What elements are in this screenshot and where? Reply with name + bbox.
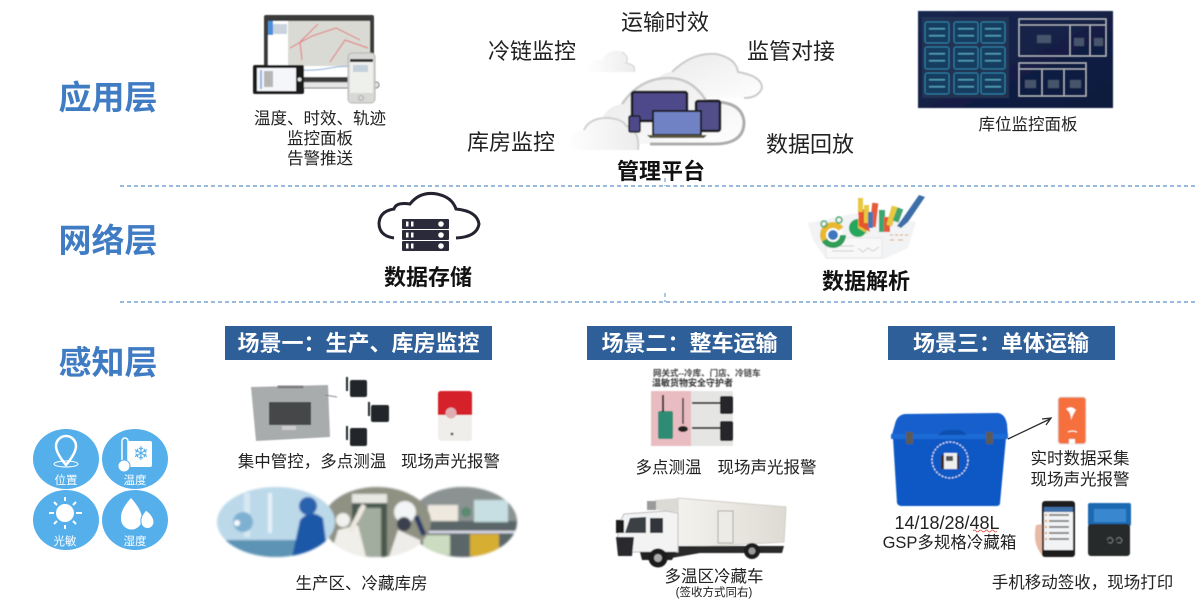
heading: data analysis: 数据解析 bbox=[822, 269, 910, 294]
text: monitoring description: 告警推送 bbox=[287, 149, 354, 168]
text: monitoring description: 温度、时效、轨迹 bbox=[254, 109, 386, 128]
icon: sound and light alarm bbox=[438, 391, 472, 441]
panel: warehouse dashboard bbox=[918, 11, 1113, 108]
text: monitoring description: 监控面板 bbox=[287, 129, 353, 148]
banner: scene two bbox=[587, 326, 792, 360]
icon: temperature: ❄ bbox=[133, 444, 149, 465]
icon: temperature bbox=[102, 429, 168, 489]
text: truck caption: 多温区冷藏车 bbox=[664, 567, 764, 586]
text: mobile sign-off caption: 手机移动签收，现场打印 bbox=[992, 573, 1173, 592]
panel: gateway sensor card bbox=[651, 368, 761, 446]
banner: scene one bbox=[225, 326, 492, 360]
text: cooler caption: 14/18/28/48L bbox=[894, 513, 1000, 533]
text: real-time capture caption: 现场声光报警 bbox=[1030, 470, 1130, 489]
icon: data analysis charts bbox=[808, 195, 925, 259]
label: regulatory integration: 监管对接 bbox=[747, 39, 835, 64]
divider lines bbox=[120, 178, 1197, 302]
arrow: cooler to tag bbox=[1008, 418, 1051, 439]
heading: sensing layer: 感知层 bbox=[58, 344, 158, 381]
banner: scene three: 场景三：单体运输 bbox=[913, 331, 1089, 356]
text: dashboard caption: 库位监控面板 bbox=[978, 115, 1078, 134]
text: production caption: 生产区、冷藏库房 bbox=[296, 574, 428, 593]
banner: scene three bbox=[888, 326, 1115, 360]
icon: humidity: 湿度 bbox=[124, 534, 147, 548]
icons: wireless sensors bbox=[346, 377, 389, 446]
text: alarm caption two: 现场声光报警 bbox=[718, 458, 816, 477]
text: truck caption: (签收方式同右) bbox=[676, 585, 752, 599]
label: warehouse monitoring: 库房监控 bbox=[467, 130, 555, 155]
icons: sensing capabilities bbox=[33, 429, 168, 550]
text: monitoring description bbox=[254, 109, 386, 168]
label: cold chain monitoring: 冷链监控 bbox=[488, 39, 576, 64]
icon: cloud server bbox=[379, 193, 479, 251]
icon: phone and printer bbox=[1035, 501, 1131, 557]
heading: data storage: 数据存储 bbox=[384, 265, 472, 290]
icon: temperature: 温度 bbox=[124, 473, 147, 487]
icon: blue cooler box bbox=[891, 413, 1008, 506]
panel: gateway sensor card: 温敏货物安全守护者 bbox=[652, 377, 733, 388]
icon: orange data tag bbox=[1058, 397, 1086, 444]
icon: light: 光敏 bbox=[54, 534, 77, 548]
text: real-time capture caption bbox=[1030, 449, 1130, 489]
label: transport timeliness: 运输时效 bbox=[621, 10, 709, 35]
icon: monitoring devices bbox=[253, 15, 379, 103]
text: cooler caption: GSP多规格冷藏箱 bbox=[883, 533, 1016, 552]
icon: cloud platform bbox=[566, 51, 762, 150]
text: alarm caption: 现场声光报警 bbox=[401, 452, 500, 471]
icon: refrigerated truck bbox=[616, 498, 786, 568]
text: real-time capture caption: 实时数据采集 bbox=[1030, 449, 1130, 468]
banner: scene one: 场景一：生产、库房监控 bbox=[237, 331, 480, 356]
label: data playback: 数据回放 bbox=[766, 132, 854, 157]
icon: central control panel bbox=[251, 385, 337, 441]
photos: production and cold storage bbox=[216, 487, 520, 557]
text: truck caption bbox=[664, 567, 764, 599]
text: multi-point caption: 多点测温 bbox=[636, 458, 702, 477]
heading: application layer: 应用层 bbox=[58, 79, 158, 116]
text: cooler caption bbox=[883, 513, 1016, 552]
panel: gateway sensor card: 网关式--冷库、门店、冷链车 bbox=[653, 368, 761, 378]
heading: management platform: 管理平台 bbox=[617, 159, 705, 184]
heading: network layer: 网络层 bbox=[58, 222, 158, 259]
banner: scene two: 场景二：整车运输 bbox=[601, 331, 778, 356]
icon: location: 位置 bbox=[54, 473, 78, 487]
text: central control caption: 集中管控，多点测温 bbox=[238, 452, 386, 471]
